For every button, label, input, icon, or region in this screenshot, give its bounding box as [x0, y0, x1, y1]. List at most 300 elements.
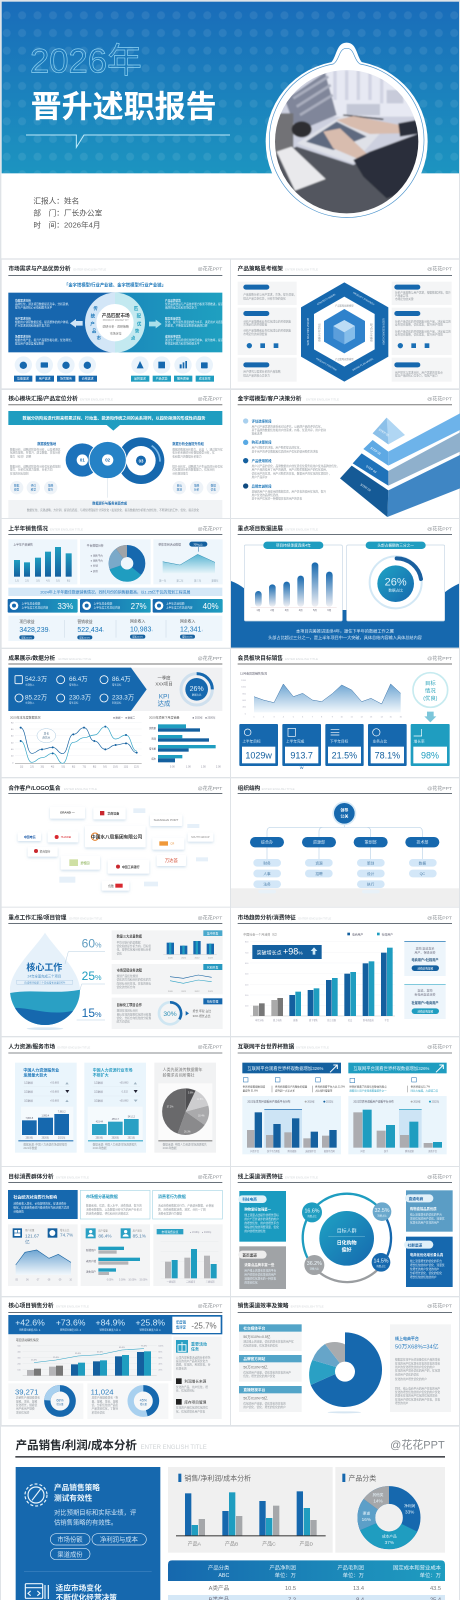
calculation card: 线上电商平台 [395, 1335, 419, 1341]
left and right notes: 提升分析优，战略能力产生运营的分析优化 [172, 464, 223, 468]
growth band: +84.9% [96, 1318, 125, 1328]
note columns: 世界杯观看了利用年度整体的观点 [349, 1085, 387, 1089]
calculation card: 根据最优化平台的流量优化产品的增长 [395, 1358, 440, 1362]
line chart: 12月 [134, 764, 139, 768]
line chart: ■ 数据一 ■ 数据二 [113, 716, 136, 720]
header [238, 265, 452, 276]
right tips column: 化、优化的增长用户优化 [176, 1409, 206, 1413]
header: 金字塔模型/客户决策分析 [238, 395, 302, 403]
target status circle: (优良) [423, 694, 438, 702]
pie card: 37.2% [167, 1106, 173, 1108]
right tips column: 析增长的 [176, 1366, 187, 1370]
card two: 433.44 [96, 1121, 104, 1123]
grouped bar with line: 60% [158, 1358, 163, 1360]
percent pills [8, 599, 223, 613]
work cards: 集中开发 [207, 931, 218, 935]
ring diagram: 消费占比 [376, 1264, 386, 1268]
hexagon model: BRAND PLAN MODEL [352, 357, 375, 372]
line chart: 10月 [113, 764, 118, 768]
data banners: 互联网平台观看世界杯观数据增加326% [353, 1065, 429, 1072]
area chart card [153, 539, 223, 584]
panel: market demand and product advantages [2, 260, 230, 388]
team pills: 设计 [367, 871, 375, 876]
data table: 10.5 [285, 1586, 296, 1592]
panel: core module report: 评估 [31, 484, 36, 488]
percent pills: 上半年总业绩额 [166, 601, 185, 605]
bottom stats: 优化增长，规模优 [16, 1403, 38, 1407]
panel: cover hero [1, 2, 459, 258]
note columns: 世界杯观看用户的整体的增量 [275, 1085, 308, 1089]
metric card: 12,341↑ [180, 626, 203, 633]
outlined year: 2026年 [30, 43, 142, 81]
header: 线上渠道消费特征 [238, 1172, 283, 1180]
left channel cards: 线上流量占比提升的增长目标 [244, 1213, 279, 1217]
right tips column: 任务 [191, 1346, 199, 1352]
header: @花花PPT [198, 525, 222, 532]
bar card: 项目持续季度连续4年 [276, 543, 311, 548]
card one: 7,863.5 [25, 1118, 34, 1120]
work cards: 的方向优化 [117, 1020, 130, 1024]
top cards: 分级趋势 [13, 1209, 24, 1213]
stat bar card: 85.1% [133, 1234, 146, 1239]
top cards: 消费者需求行为数据 [158, 1211, 182, 1215]
line chart: 3月 [41, 764, 44, 768]
header [238, 913, 452, 924]
label chips [14, 376, 214, 382]
banner: 统 [91, 313, 96, 320]
card one: 3月数据 [24, 1098, 33, 1102]
stat bar card: 15.00% [139, 1280, 147, 1282]
hero blue banner [2, 2, 459, 173]
grouped bar chart: 400 [245, 984, 249, 986]
panel: sales channel efficiency [231, 1297, 459, 1425]
channel list: 优化，增长优化的用户优化 [243, 1374, 276, 1378]
right channel cards: 增长优化的用户优化、流量优 [410, 1216, 445, 1220]
pills [243, 285, 420, 367]
header: @花花PPT [198, 266, 222, 273]
card one: 2月数据 [24, 1089, 33, 1093]
donut card: 37% [385, 1540, 394, 1545]
user comparison cards: 渠道、直购 [418, 987, 432, 992]
line chart: 90 [11, 722, 14, 724]
work cards: 化，提供优化和分析目标分析 [117, 948, 152, 952]
strategy text [243, 290, 451, 378]
grouped bar chart: 社媒用户 [382, 932, 393, 936]
panel: core module report: 数据 [14, 484, 20, 488]
stacked bar card [8, 539, 77, 584]
note columns: 量提升 31.6% [243, 1088, 259, 1092]
right channel cards: 线上流量增长的优化的平台 [410, 1259, 442, 1263]
header: ENTER ENGLISH TITLE [73, 268, 106, 272]
banner: 市 [97, 335, 102, 342]
work cards: 优化的分析方向 [117, 985, 136, 989]
work cards: 2023 [208, 957, 214, 959]
reporter info: 部 门：厂长办公室 [33, 208, 103, 218]
bottom note box [8, 500, 222, 518]
growth band: -25.7% [191, 1321, 217, 1330]
card two: 2月数据 [94, 1089, 103, 1093]
left and right notes: 数据分析、战略的阶段性分析，以及预测优 [10, 447, 61, 451]
label chips: 场景服务 [60, 376, 72, 381]
donut card: 16% [362, 1517, 371, 1522]
water drop: 核心工作 [26, 962, 62, 973]
pyramid legend: 用户对产品的优化，品牌数据用户的优质优化服务和用户使用品牌的优化， [252, 464, 339, 468]
strategy card [16, 1467, 160, 1600]
stat column card: 市场消费总览 [162, 1230, 179, 1234]
horizontal bar chart: 1.00 [186, 765, 191, 768]
metric card: 10,983↑ [130, 626, 153, 633]
header: 会员板块目标销售 [238, 654, 283, 662]
pyramid legend: 基础的用户产品使用的数据优质，用户优化的使用优化的，提升 [252, 489, 326, 493]
banner: 优化、提升服务质量的能力水平，满足用户对质量 [165, 320, 224, 324]
left channel cards: 用户的增长优化增长的用户 [244, 1273, 277, 1277]
callout banner [8, 411, 222, 431]
work cards: 指标管理 [207, 1000, 218, 1004]
icon: gear [25, 1484, 47, 1506]
left channel cards [238, 1191, 286, 1289]
card two: 2021年数据 [93, 1146, 107, 1150]
metric cards: 98% [421, 751, 439, 761]
banner: 产品品牌优势 [165, 298, 181, 302]
header: ENTER ENGLISH TITLE [285, 1175, 318, 1179]
right tips column: 提高的用户产品利润优化方 [176, 1359, 208, 1363]
hexagon model: 产品策略规划模型 [335, 357, 354, 361]
left channel cards: 用户广泛并进步的消费的用户 [244, 1217, 279, 1221]
metric card: 增长10.0% [182, 635, 193, 639]
data banners [242, 1063, 447, 1073]
banner: 用户需求分析 [15, 316, 31, 320]
banner: 的要求，不断提高复购率和品牌口碑 [165, 324, 208, 328]
banner: PRODUCT MARKET FIT [103, 319, 129, 322]
header [15, 1438, 445, 1458]
header [8, 1172, 222, 1183]
card two: 数据来源: 中国人力资源市场调研报告 [93, 1143, 137, 1147]
left grouped chart: 快手平台观看 [267, 1149, 281, 1153]
data table [168, 1560, 445, 1600]
summary text: 头部占比超过三分之一，是上半年项目中一大突破，具体总结内容输入具体总结内容 [268, 634, 422, 640]
pyramid legend [243, 418, 339, 501]
banner: 传 [93, 305, 98, 312]
left channel cards: 特征的优化的消费流量、优化 [244, 1225, 279, 1229]
label chips: 功能需求 [17, 376, 29, 381]
header [8, 1302, 222, 1313]
grouped bar chart: 新电商渠道 [363, 1018, 375, 1022]
percent pills: 33% [57, 602, 73, 611]
panel: key work report [2, 908, 230, 1036]
line chart: 2月 [30, 764, 34, 768]
hexagon model [301, 282, 388, 382]
bar card: 3月 [285, 608, 289, 612]
stat area card: 08 [48, 1280, 51, 1282]
horizontal bar chart: 增长额 [149, 746, 157, 750]
strategy card: 市场份额 [57, 1535, 83, 1544]
grouped bar chart: 线上电商 [273, 1018, 282, 1022]
card one: 2020年 [42, 1135, 50, 1139]
donut card: 净利润 [404, 1503, 415, 1508]
rose chart [309, 1332, 382, 1413]
data table: 产品净利润 [269, 1564, 296, 1572]
three ring diagram: 03 [139, 458, 144, 463]
stacked bar card: 4月 [46, 578, 50, 582]
right channel cards: 增长优化的用户优化、流量优 [410, 1263, 445, 1267]
hexagon model: STRATEGY MODEL [316, 293, 337, 306]
left and right notes: 分析规划能力 [172, 471, 189, 475]
header: 产品销售/利润/成本分析 [16, 1438, 137, 1452]
pyramid legend: 基于品牌的数据优化和用户的需求，价格、优质并存，用户的决 [252, 428, 326, 432]
panel: core module report: 策略 [194, 484, 200, 488]
left and right notes: 能力（综合）调整 [10, 454, 32, 458]
work cards: 2022 [195, 957, 200, 959]
area chart: 9 [332, 716, 334, 718]
work cards: 2022 [195, 991, 200, 993]
bottom stats: 增长量 [140, 1402, 147, 1406]
strategy text: 分析产品优化的关键因素分析产品，决定差异的 [395, 319, 451, 323]
work cards: 2023 [208, 991, 214, 993]
donut card: 14% [373, 1498, 383, 1503]
ring diagram: 32.5% [374, 1208, 390, 1214]
pyramid [340, 413, 460, 517]
donut card: 数据占比 [388, 588, 403, 593]
banner: 品牌的差异化和市场竞争力 [165, 306, 197, 310]
logo marks: 中国工商银行 [122, 864, 140, 869]
right grouped chart: 抖音 [360, 1149, 366, 1153]
donut card: 渠道 [363, 1510, 370, 1515]
line chart: 0 [12, 762, 14, 764]
metric cards: 21.5% [332, 751, 357, 761]
donut card: 其他类 [373, 1492, 384, 1497]
horizontal bar chart: 成本 [151, 756, 157, 760]
pyramid: STEP 03 [365, 464, 378, 474]
target status circle [413, 673, 448, 722]
area chart: 600 [242, 700, 247, 702]
work cards: 2020 [168, 991, 174, 993]
work cards: 2021 [181, 991, 187, 993]
summary band: 2024年上半年最佳数据销售情况，同时月份的销售额最高，以1.25亿千瓦的规划工程进展 [40, 589, 190, 594]
card one: 中国人力资源服务业 [23, 1067, 59, 1073]
work cards: 向目标分析优化，优化的目标 [117, 981, 152, 985]
header: @花花PPT [427, 396, 452, 403]
area chart: 11 [351, 716, 354, 718]
left grouped chart: 腾讯视频 [288, 1149, 297, 1153]
line chart: 1月 [20, 764, 23, 768]
header: @花花PPT [427, 1173, 452, 1180]
header: ENTER ENGLISH TITLE [291, 1305, 324, 1309]
grouped bar chart: 本月分析 [255, 1018, 264, 1022]
pyramid legend: 购买决策阶段 [252, 440, 272, 445]
bar chart card: 产品C [262, 1540, 276, 1547]
card one: 2021年数据 [23, 1146, 38, 1150]
header: ENTER ENGLISH TITLE [69, 916, 102, 920]
stat bar card: 86.4% [98, 1234, 112, 1239]
strategy text: 提高产品竞争优势，分析市场的变化 [243, 296, 286, 300]
calculation card [390, 1324, 451, 1412]
channel list: 50万X10%=0.5亿 [243, 1334, 271, 1339]
strategy card: 对比预期目标和实际业绩，评 [54, 1507, 137, 1516]
hexagon model: 用户需求分析模型 [370, 323, 374, 342]
growth band: 销售增长额度占比 ▲ [100, 1327, 121, 1331]
team pills: 财务 [263, 860, 271, 865]
metric cards: 1029w [245, 751, 272, 761]
team pills: 数据 [419, 860, 426, 865]
grouped bar with line: 25.5% [53, 1357, 59, 1359]
stat area card: 74.7% [60, 1233, 73, 1238]
donut card: ● 销售平台 [91, 553, 103, 557]
metric cards: W [300, 765, 304, 770]
left grouped chart: 视频平台网 [324, 1149, 335, 1153]
area chart: 1200 [241, 680, 247, 682]
side cards [238, 282, 452, 382]
left and right notes: 数据分析全面提升阶段 [172, 441, 205, 446]
leader node [332, 801, 356, 825]
line chart: 趋势点 [42, 735, 51, 739]
card two: 中国人力资源行业市场 [93, 1067, 133, 1073]
area chart: 10 [340, 716, 344, 718]
area chart: 3 [273, 716, 275, 718]
top cards: 消费者行为数据 [158, 1193, 186, 1199]
donut card: ● 分销 [91, 564, 98, 568]
work cards: 数量三大总量数据 [117, 934, 143, 939]
stat bar card: 0.00% [107, 1280, 113, 1282]
grouped bar with line: 400 [17, 1352, 22, 1354]
card one: 7,963.2 [58, 1112, 66, 1114]
strategy card: 渠道成份 [57, 1549, 83, 1558]
left and right notes: 优化的目标规划 [10, 471, 29, 475]
header: @花花PPT [427, 914, 452, 921]
connectors [267, 823, 422, 859]
right tips column: 利润增长来源 [184, 1379, 207, 1384]
left channel cards: 用户线上的增长优化的平台 [244, 1269, 277, 1273]
pie card: 人类先驱流传数据需年 [163, 1066, 203, 1072]
metric cards: 下半年目标 [330, 738, 349, 743]
grouped bar with line: 65.5% [119, 1347, 125, 1349]
header: ENTER ENGLISH TITLE [58, 657, 91, 661]
stat bar card: 用户留存 [133, 1229, 143, 1233]
data table: 单位：万 [343, 1571, 364, 1579]
bottom stats: 规模，增长、规模 [16, 1399, 38, 1403]
pyramid: STEP 04 [359, 483, 372, 493]
left and right notes: 数据的数据分析能力，比如（，通过提升优 [172, 447, 223, 451]
stat area card: 121.67 [25, 1233, 40, 1238]
header: ENTER ENGLISH TITLE [56, 1305, 89, 1309]
work cards: 市场营销业务流程 [117, 967, 143, 972]
water drop: 完成率持续第三个目标增长总量100% [24, 980, 66, 984]
banner: 优势品牌建设与产品技术能力积累不断推进，提高 [165, 302, 224, 306]
right channel cards: 化增长的用户优化的用户 [410, 1267, 440, 1271]
pie card: 12.8% [197, 1099, 203, 1101]
ring diagram: 消费占比 [307, 1214, 317, 1218]
department pills: 策划部 [365, 839, 377, 845]
banner: 优 [137, 320, 142, 327]
stat area card [8, 1224, 78, 1286]
strategy text: 用户研究与需求分析，用户需求的优化点 [395, 370, 443, 374]
pie card: 数据来源: 中国人力资源市场调研报告 [163, 1143, 207, 1147]
panel: product strategy framework [231, 260, 459, 388]
pyramid legend: 用户优化的品牌优质的， [252, 493, 281, 497]
percentages [65, 937, 105, 1020]
header: 重点工作汇报/项目管理 [8, 913, 67, 921]
grouped bar chart: 电商用户 [352, 932, 363, 936]
strategy text: 用户研究与需求分析的产品策略 [243, 370, 281, 374]
panel: core module report: 分析 [194, 487, 200, 491]
kpi band: 增长收入 [69, 682, 79, 686]
line chart: 7月 [83, 764, 86, 768]
data table: ABC [218, 1573, 229, 1579]
area chart: 13 [370, 716, 373, 718]
right channel cards [404, 1190, 453, 1287]
grouped bar chart: 300 [245, 995, 249, 997]
strategy card: 测试有效性 [54, 1492, 93, 1502]
horizontal bar chart: 2.00 [216, 765, 221, 768]
banner: 产 [90, 320, 95, 327]
work cards: 目标优化的规划优化的分析规 [117, 1012, 152, 1016]
grouped bar with line: 45.5% [97, 1352, 103, 1354]
area chart: 2 [263, 716, 265, 718]
bar card: 4月 [299, 608, 303, 612]
area chart card: 第三年 [194, 578, 202, 582]
ring diagram: 14.5% [373, 1259, 389, 1265]
card one: +50,883 [50, 1099, 60, 1102]
header: 核心项目销售分析 [8, 1302, 54, 1310]
header: ENTER ENGLISH TITLE [141, 1445, 207, 1451]
right tips column: 库存项目管理 [184, 1399, 207, 1404]
header: @花花PPT [198, 914, 222, 921]
left and right notes: 化和提升的数据分析能力 [172, 454, 202, 458]
stat bar card: 新增用户 [86, 1248, 97, 1252]
growth band: +25.8% [136, 1318, 165, 1328]
bottom stats [8, 1383, 168, 1419]
data banners: 互联网平台观看世界杯观数据增加326% [247, 1065, 323, 1072]
growth band: +42.6% [15, 1318, 45, 1328]
department pills [250, 837, 439, 847]
left grouped chart: 2018年 [307, 1100, 316, 1104]
right channel cards: 分析增长优化、优化的优化 [410, 1271, 442, 1275]
team pills: 执行 [367, 882, 375, 887]
metric card: 网余收入 [130, 618, 145, 623]
ring diagram: 日化购物 [337, 1240, 357, 1247]
line chart: 50 [11, 742, 14, 744]
pie card: 26.3% [184, 1131, 191, 1133]
stat bar card: 10.00% [128, 1280, 136, 1282]
banner: 品 [92, 328, 97, 334]
bottom stats: 量，规模、增长、规模 [92, 1399, 119, 1403]
label chips: 服务质量 [177, 376, 189, 381]
user comparison cards: 消费结构规模 [417, 966, 434, 970]
bar chart card: 产品B [225, 1540, 239, 1547]
panel: member sales targets [231, 649, 459, 777]
kpi band: 主营收入 [25, 701, 35, 705]
percent pills: 上半年度工作总结内容 [94, 605, 121, 609]
stacked bar card: 上半年产品销售 [13, 543, 33, 547]
bar chart card: 销售/净利润/成本分析 [184, 1474, 251, 1483]
icon: code screen [25, 1584, 48, 1599]
banner: 整体盈利能力和市场份额水平 [165, 342, 200, 346]
data table: 单位：万 [420, 1571, 441, 1579]
data table: A类产品 [209, 1584, 230, 1592]
work cards [112, 930, 223, 1029]
grouped bar with line: 100% [158, 1346, 164, 1348]
logo marks: 中国电信 [24, 834, 36, 839]
label chips: 产品优势 [156, 376, 168, 381]
percent pills: 上半年度工作总结内容 [166, 605, 193, 609]
left and right notes: 优化规划分析的数据能力，优化分析 [172, 468, 215, 472]
banner: 匹 [134, 306, 139, 311]
hexagon model: PRODUCT POSITION [315, 358, 337, 372]
panel: internet platform world cup data [231, 1037, 459, 1166]
left channel cards: 的增长优化、用户的增长平台 [244, 1221, 279, 1225]
donut card: 33% [405, 1509, 414, 1514]
strategy text: 提高产品的核心竞争力，强化产品力 [395, 374, 438, 378]
metric card: 网余收入 [180, 618, 195, 623]
